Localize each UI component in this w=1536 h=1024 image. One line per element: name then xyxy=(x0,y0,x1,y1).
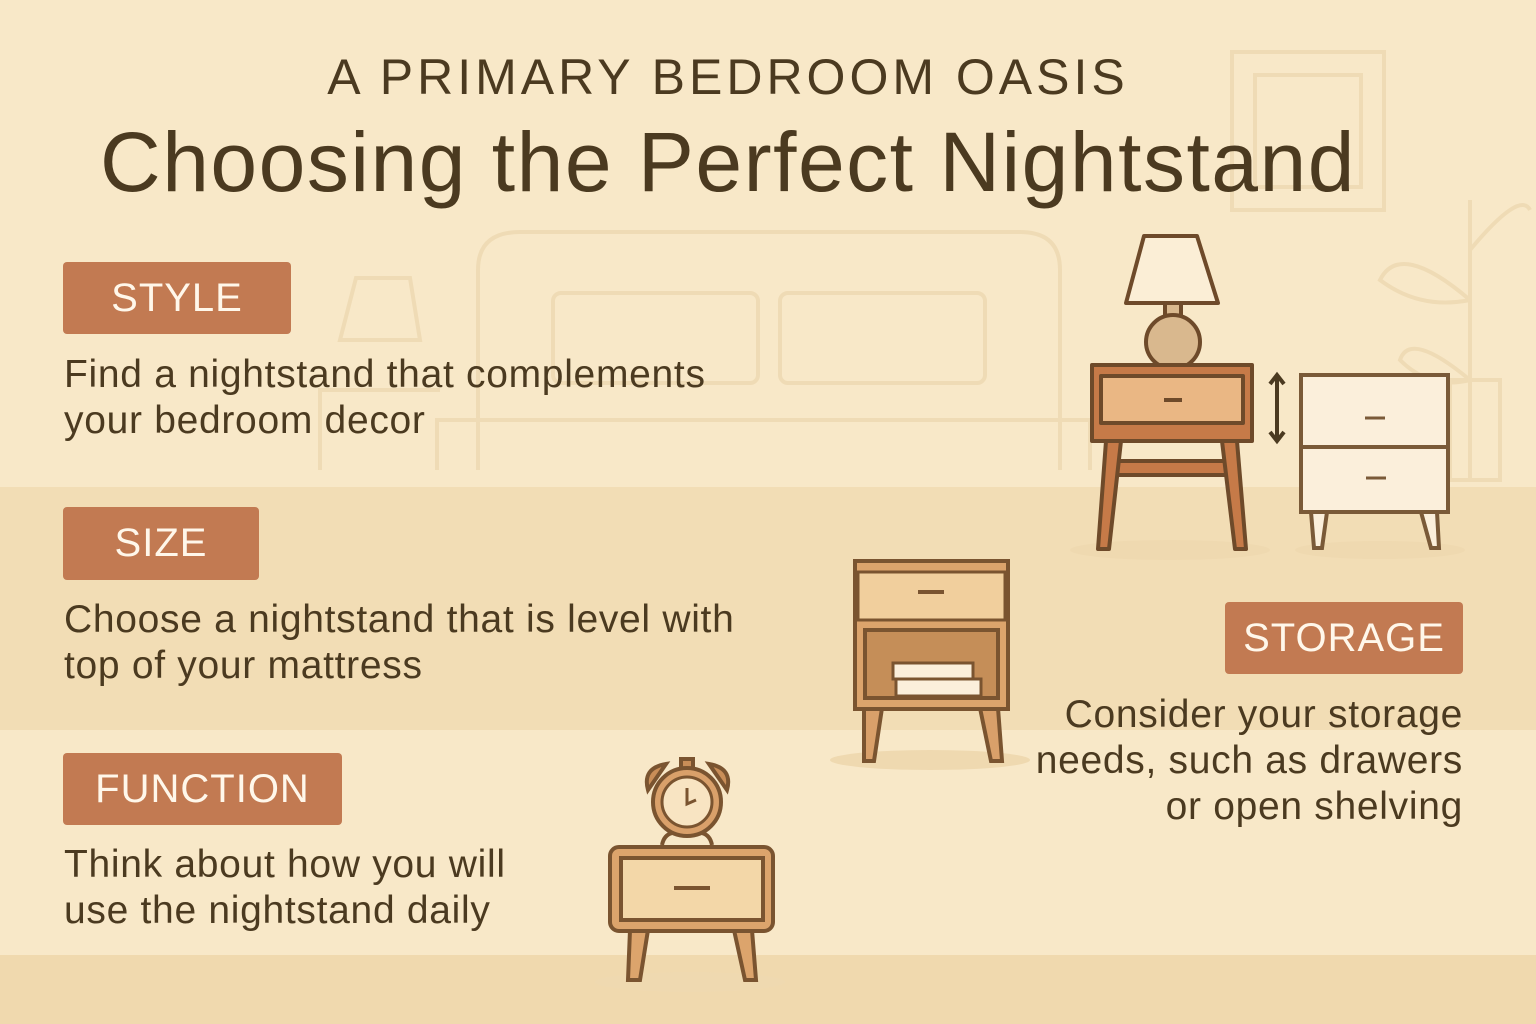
label: function xyxy=(63,753,342,825)
text: style: Find a nightstand that complements xyxy=(64,353,706,396)
nightstand with lamp xyxy=(1070,236,1270,560)
white nightstand xyxy=(1295,375,1465,559)
title xyxy=(100,49,1356,209)
text: size: Choose a nightstand that is level with xyxy=(64,598,734,641)
label: function: FUNCTION xyxy=(95,766,310,810)
nightstand with clock xyxy=(595,759,785,992)
height arrow xyxy=(1270,375,1284,441)
label: style: STYLE xyxy=(111,276,243,320)
text: size: top of your mattress xyxy=(64,644,423,687)
text: style: your bedroom decor xyxy=(64,399,426,442)
nightstand with shelf xyxy=(830,561,1030,770)
text: storage: Consider your storage xyxy=(1065,693,1463,736)
label: size: SIZE xyxy=(115,521,207,565)
text: style xyxy=(64,353,706,442)
label: size xyxy=(63,507,259,580)
text: storage: needs, such as drawers xyxy=(1036,739,1463,782)
text: function: Think about how you will xyxy=(64,843,506,886)
title: A PRIMARY BEDROOM OASIS xyxy=(327,49,1129,105)
text: function xyxy=(64,843,506,932)
text: storage xyxy=(1036,693,1463,828)
text: size xyxy=(64,598,734,687)
label: storage xyxy=(1225,602,1463,674)
text: storage: or open shelving xyxy=(1166,785,1463,828)
label: storage: STORAGE xyxy=(1243,616,1445,660)
text: function: use the nightstand daily xyxy=(64,889,491,932)
label: style xyxy=(63,262,291,334)
title: Choosing the Perfect Nightstand xyxy=(100,115,1356,209)
